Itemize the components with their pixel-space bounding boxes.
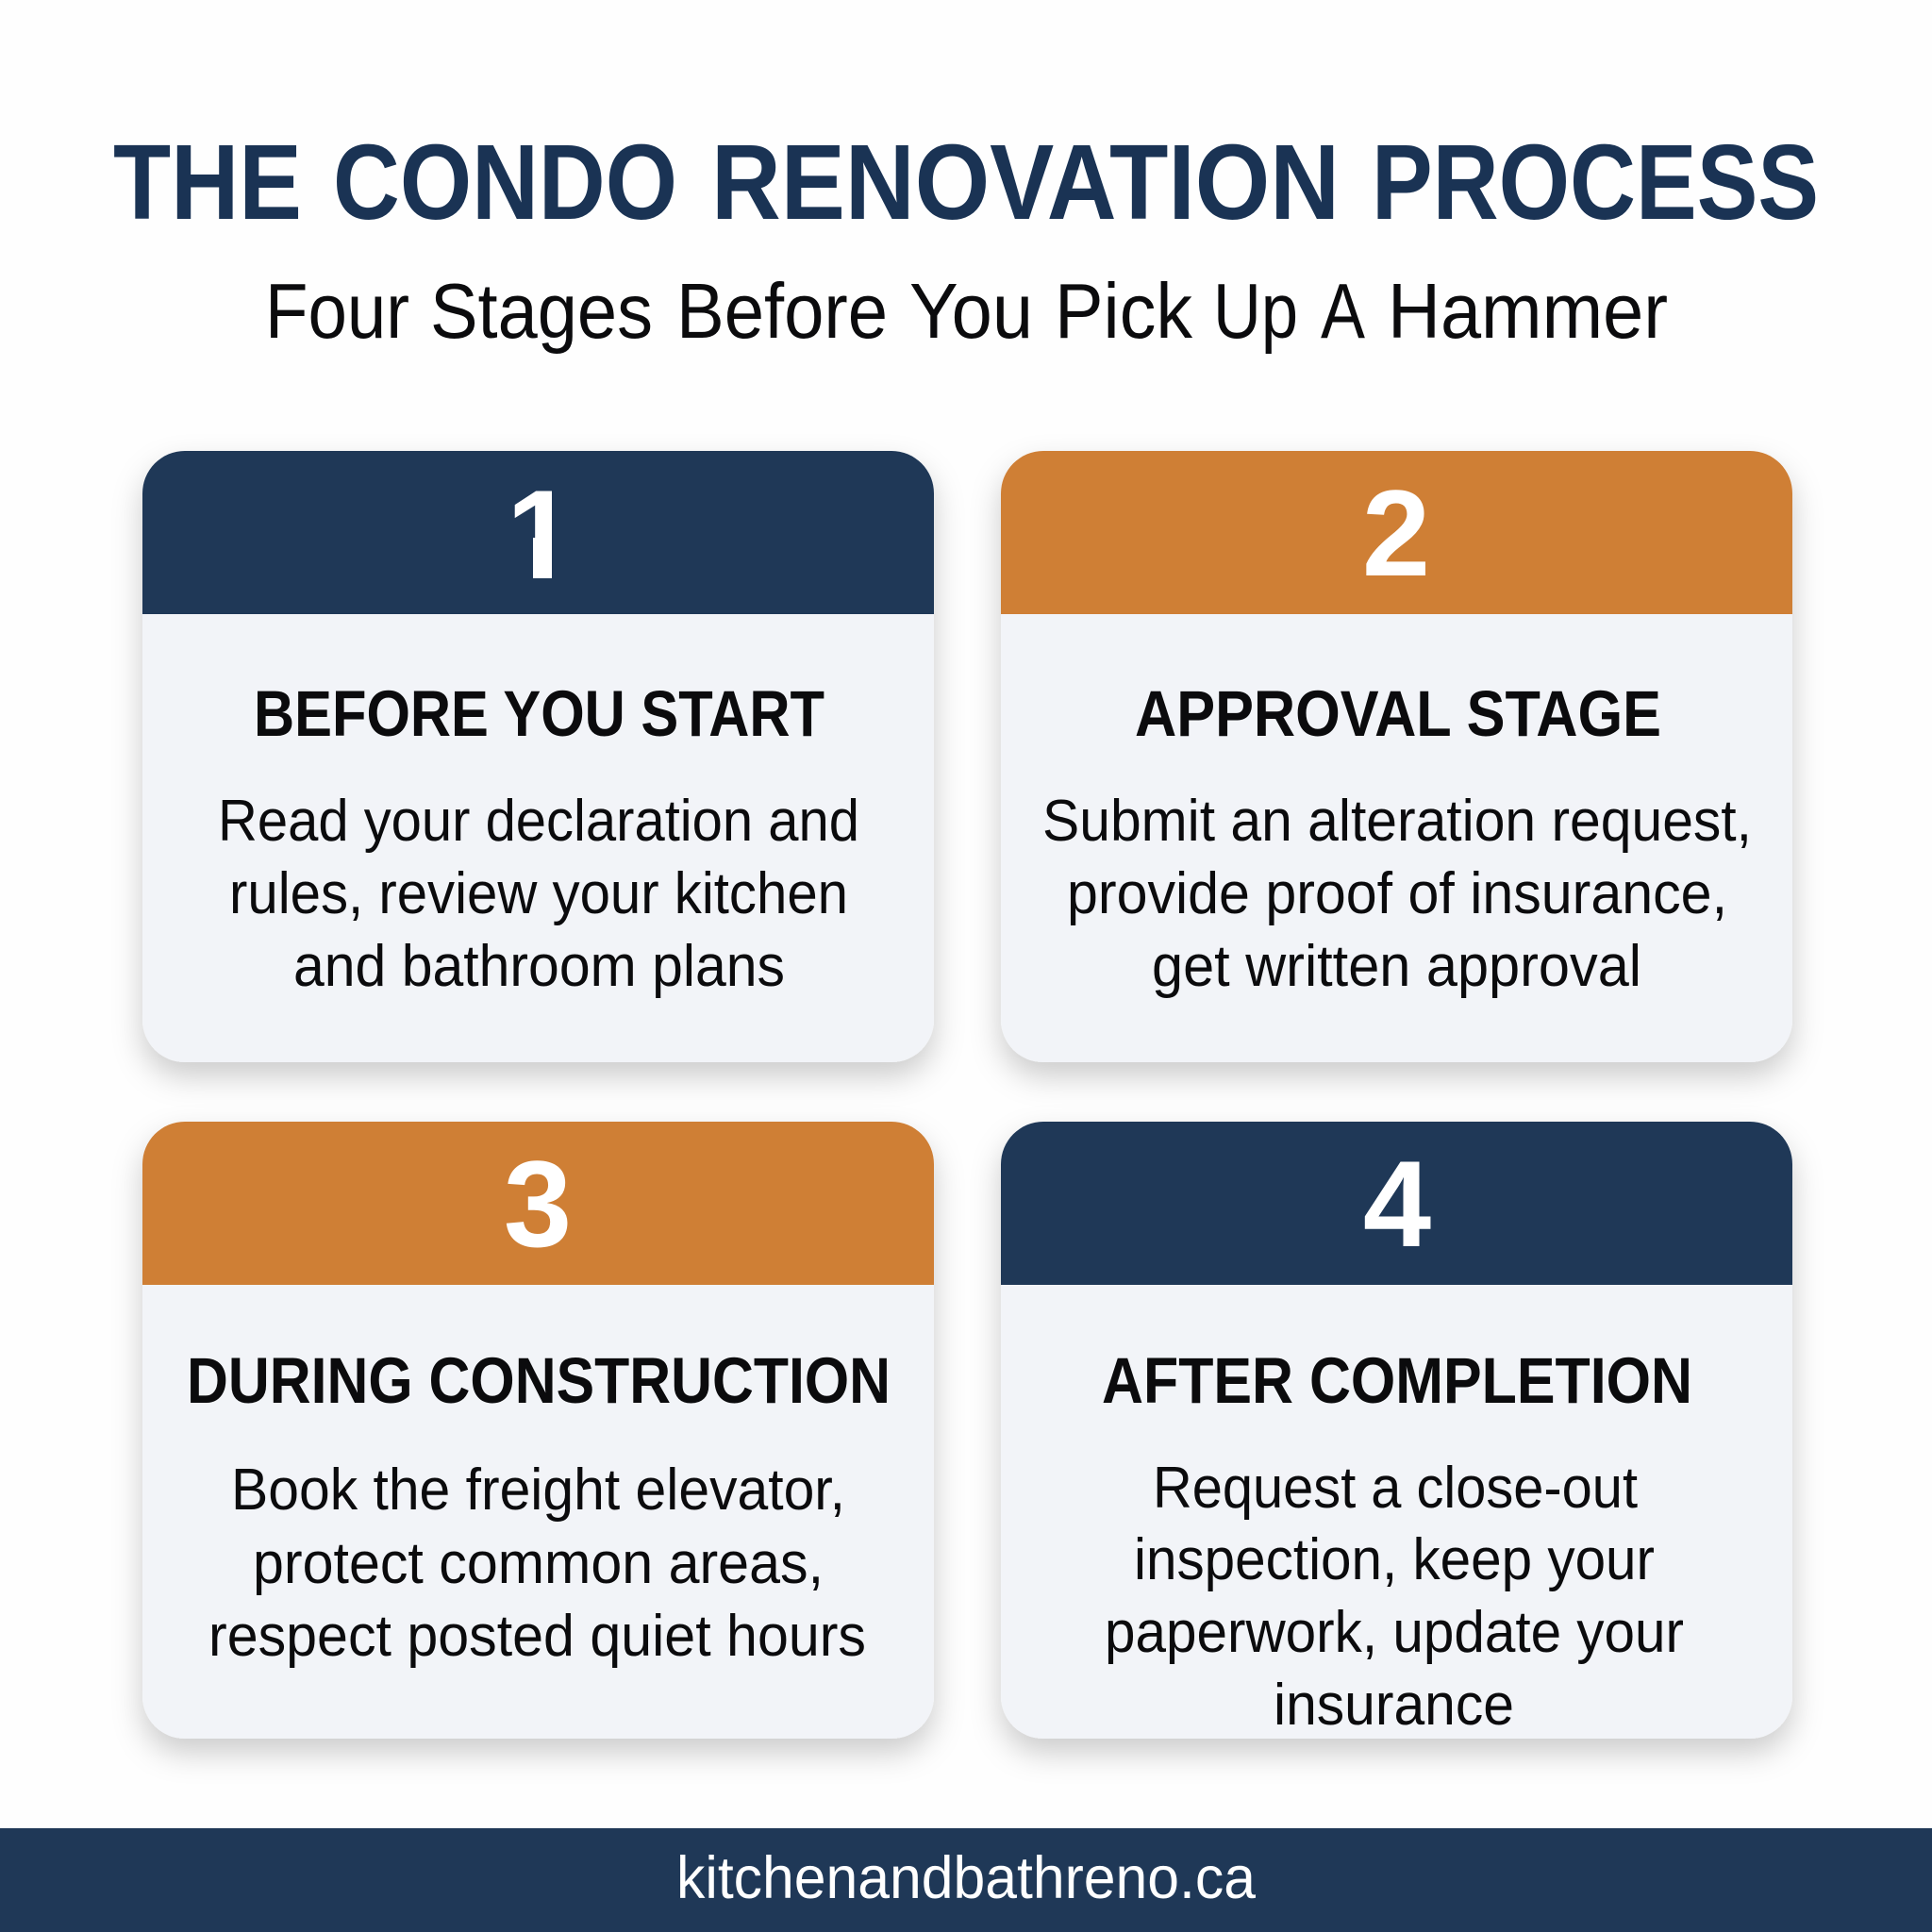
title: RENOVATION	[711, 123, 1340, 242]
subtitle: Hammer	[1388, 267, 1668, 355]
panel: stage 3 during construction	[142, 1122, 934, 1739]
subtitle: Four	[265, 267, 409, 355]
title: PROCESS	[1372, 123, 1819, 242]
body text 2	[1042, 789, 1752, 999]
number 4: 4	[1363, 1135, 1431, 1273]
number 1: 1	[507, 464, 575, 602]
subtitle: Pick	[1055, 267, 1192, 355]
subtitle: Up	[1213, 267, 1298, 355]
subtitle: You	[909, 267, 1033, 355]
header band 1	[142, 451, 934, 614]
body text 4: insurance	[1274, 1673, 1514, 1738]
body text 1	[218, 789, 859, 999]
subtitle: A	[1321, 267, 1366, 355]
body text 1: Read your declaration and	[218, 789, 859, 854]
header band 3	[142, 1122, 934, 1285]
title: THE	[113, 123, 302, 242]
body text 2: provide proof of insurance,	[1067, 861, 1727, 926]
body text 3: protect common areas,	[253, 1531, 824, 1596]
number 1	[515, 491, 552, 578]
panel: stage 2 approval stage	[1001, 451, 1792, 1062]
heading 2: APPROVAL STAGE	[1135, 677, 1661, 750]
body text 2: get written approval	[1152, 934, 1641, 999]
panel: stage 4 after completion	[1001, 1122, 1792, 1739]
body text 3	[208, 1457, 866, 1669]
panel: stage 1 before you start	[142, 451, 934, 1062]
heading 3: DURING CONSTRUCTION	[187, 1344, 891, 1417]
footer url: kitchenandbathreno.ca	[676, 1845, 1257, 1911]
body text 2: Submit an alteration request,	[1042, 789, 1752, 854]
body text 1: rules, review your kitchen	[229, 861, 848, 926]
body text 3: respect posted quiet hours	[208, 1604, 866, 1669]
body text 4: inspection, keep your	[1134, 1527, 1655, 1592]
footer bar	[0, 1828, 1932, 1932]
body text 3: Book the freight elevator,	[231, 1457, 845, 1523]
body text 4: paperwork, update your	[1105, 1600, 1684, 1665]
title	[113, 123, 1819, 242]
number 2: 2	[1362, 464, 1430, 602]
body text 4: Request a close-out	[1153, 1456, 1638, 1521]
subtitle: Before	[676, 267, 888, 355]
body text 4	[1105, 1456, 1684, 1738]
subtitle	[265, 267, 1668, 355]
heading 4: AFTER COMPLETION	[1102, 1344, 1692, 1417]
number 3: 3	[504, 1135, 572, 1273]
header band 2	[1001, 451, 1792, 614]
subtitle: Stages	[430, 267, 653, 355]
body text 1: and bathroom plans	[293, 934, 785, 999]
header band 4	[1001, 1122, 1792, 1285]
title: CONDO	[333, 123, 677, 242]
heading 1: BEFORE YOU START	[254, 677, 824, 750]
